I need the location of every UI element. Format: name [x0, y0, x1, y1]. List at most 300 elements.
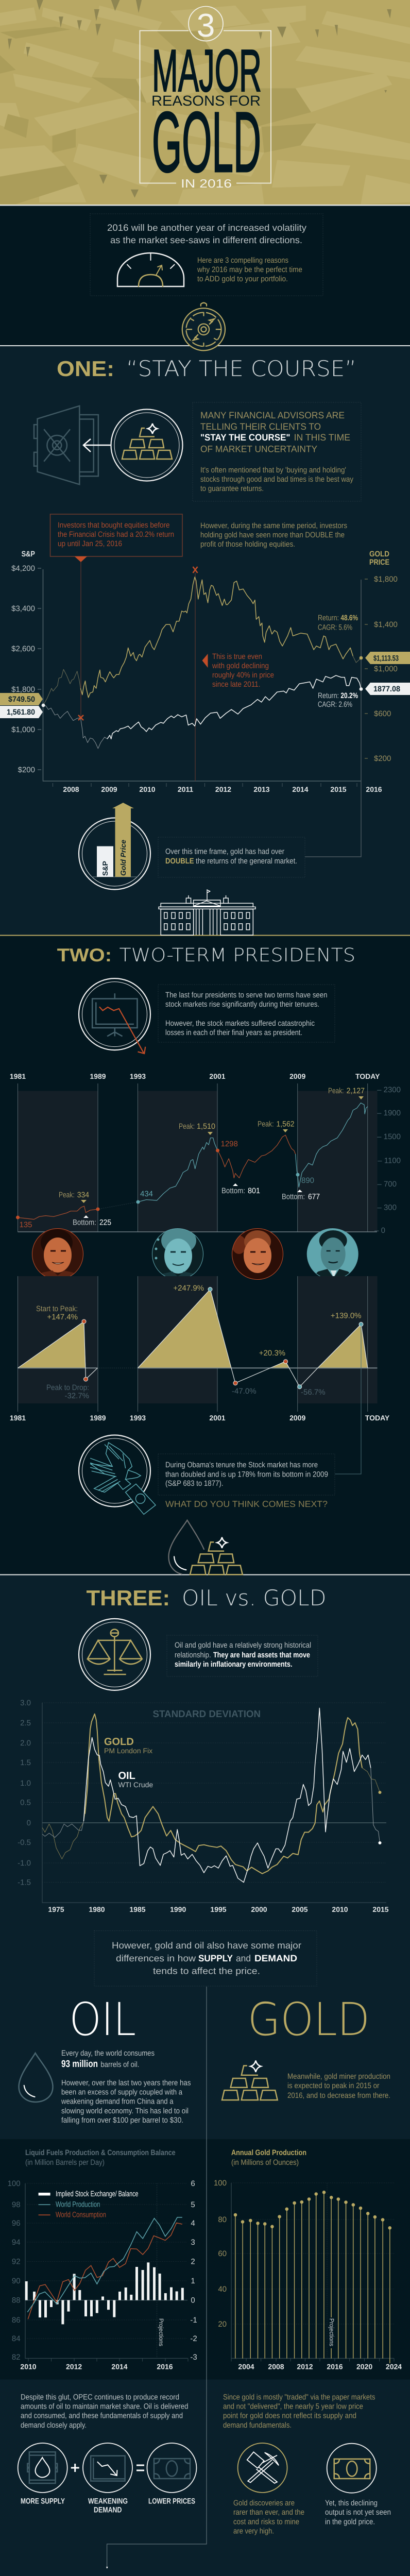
- section background: header gold: [0, 0, 410, 205]
- text: oil demand: falling from over $100 per barrel to $30.: [61, 2116, 183, 2125]
- peak and bottom labels: 2,127: [347, 1087, 365, 1095]
- arrow into safe: [83, 439, 111, 452]
- icon labels: supply equation: MORE SUPPLY: [21, 2497, 65, 2506]
- chart title: STANDARD DEVIATION: [152, 1709, 261, 1720]
- term lines and years: TODAY: [355, 1072, 380, 1080]
- text: gold production: [287, 2072, 390, 2100]
- price tags: 1,561.80: [7, 708, 35, 717]
- right axis: $1,800: [374, 575, 398, 584]
- text: gold discoveries: are very high.: [233, 2527, 274, 2536]
- right scale: -3: [190, 2353, 197, 2362]
- callout: equities return: the Financial Crisis had a 20.2% return: [58, 530, 174, 539]
- heading: two: TWO-TERM PRESIDENTS: [119, 945, 355, 966]
- x labels: 1975: [48, 1905, 64, 1913]
- gold line: [42, 1714, 380, 1874]
- percent labels: -32.7%: [64, 1392, 89, 1400]
- legend: [39, 2190, 138, 2219]
- peak and bottom labels: 890: [301, 1176, 314, 1185]
- series dots: [16, 1149, 300, 1219]
- price tags: 1877.08: [373, 685, 400, 693]
- legend: World Consumption: [56, 2210, 106, 2219]
- icon: gold banknote: [327, 2444, 377, 2493]
- scale: 60: [218, 2249, 227, 2258]
- icon: white house: [159, 890, 255, 935]
- chart: liquid fuels balance: [8, 2148, 197, 2371]
- text: oil demand: [61, 2049, 191, 2125]
- term lines and years: 2009: [289, 1414, 305, 1422]
- icon: oil drop: [19, 2053, 53, 2102]
- text: gold double: profit of those holding equities.: [200, 540, 295, 549]
- peak and bottom labels: 677: [308, 1192, 320, 1201]
- text: gold double: However, during the same time period, investors: [200, 521, 347, 530]
- right axis: $600: [374, 709, 391, 718]
- icon: oil drop and gold: [168, 1520, 243, 1574]
- text panel: stay the course: IN THIS TIME: [294, 432, 350, 443]
- percent labels: +147.4%: [47, 1313, 78, 1321]
- x labels: 1985: [129, 1905, 146, 1913]
- chart title: Liquid Fuels Production & Consumption Balance: [25, 2148, 176, 2157]
- text panel: Obama tenure: (S&P 683 to 1877).: [165, 1479, 224, 1488]
- series labels: OIL: [118, 1770, 135, 1782]
- text panel: supply and demand: SUPPLY: [198, 1953, 233, 1963]
- bar: gold price: [112, 803, 134, 877]
- left scale: [8, 2179, 21, 2362]
- title block: MAJOR: [152, 37, 262, 104]
- heading: one: “STAY THE COURSE”: [126, 356, 356, 381]
- text panel: supply and demand: and: [236, 1953, 251, 1963]
- oil line: [42, 1708, 380, 1883]
- heading: three: THREE:: [87, 1586, 170, 1610]
- year labels: 2008: [268, 2363, 284, 2371]
- text panel: supply and demand: [94, 1931, 317, 1986]
- text: oil demand: However, over the last two years there has: [61, 2078, 191, 2088]
- intro text panel: as the market see-saws in different directions.: [110, 235, 302, 245]
- intro callout text: why 2016 may be the perfect time: [197, 265, 302, 274]
- text: gold production: Meanwhile, gold miner production: [287, 2072, 390, 2081]
- left axis: $1,800: [11, 685, 35, 694]
- x labels: [48, 1905, 389, 1913]
- return labels: CAGR: 5.6%: [318, 623, 352, 632]
- peak and bottom labels: Bottom:: [282, 1192, 305, 1201]
- callout: equities return: up until Jan 25, 2016: [58, 539, 122, 548]
- term lines and years: [10, 1276, 390, 1422]
- icon: falling chart medallion: [79, 978, 150, 1054]
- x labels: 2000: [251, 1905, 267, 1913]
- text: declining output: [325, 2499, 391, 2527]
- year labels: 2024: [386, 2363, 402, 2371]
- peak and bottom labels: Peak:: [59, 1191, 75, 1199]
- heading: gold: GOLD: [248, 1993, 370, 2046]
- y labels: -0.5: [18, 1838, 31, 1847]
- scale: 80: [218, 2215, 227, 2224]
- text: declining output: Yet, this declining: [325, 2499, 378, 2507]
- left scale: 86: [12, 2316, 21, 2325]
- chart title: [231, 2148, 306, 2167]
- icon: lower prices banknote: [147, 2443, 197, 2493]
- left scale: 82: [12, 2353, 21, 2362]
- crash markers: [78, 567, 198, 720]
- intro callout text: to ADD gold to your portfolio.: [197, 275, 288, 283]
- x axis ticks and years: 2016: [366, 785, 382, 793]
- series labels: PM London Fix: [104, 1747, 152, 1755]
- year labels: 2004: [238, 2363, 254, 2371]
- y labels: [18, 1699, 31, 1887]
- text panel: stay the course: "STAY THE COURSE": [200, 432, 291, 443]
- icon: gauge: [117, 253, 184, 286]
- return labels: 20.2%: [340, 691, 358, 700]
- consumption and production lines: [27, 2217, 182, 2319]
- text panel: stay the course: to guarantee returns.: [200, 484, 264, 493]
- right axis: $1,400: [374, 620, 398, 629]
- peak and bottom labels: 334: [77, 1191, 89, 1199]
- area series: [18, 1289, 377, 1387]
- text panel: two-term presidents: The last four presidents to serve two terms have seen: [165, 991, 328, 999]
- peak and bottom labels: 434: [140, 1190, 153, 1198]
- x axis ticks and years: 2008: [63, 785, 79, 793]
- y labels: -1.0: [18, 1859, 31, 1868]
- icon: safe: [34, 406, 98, 484]
- text panel: double returns: Over this time frame, gold has had over: [165, 847, 284, 856]
- line series: [18, 1103, 368, 1219]
- text panel: Obama tenure: During Obama's tenure the Stock market has more: [165, 1461, 318, 1469]
- scale: 40: [218, 2285, 227, 2294]
- intro callout text: Here are 3 compelling reasons: [197, 256, 288, 265]
- right scale: 3: [191, 2238, 195, 2247]
- x axis ticks and years: 2010: [139, 785, 156, 793]
- icon: gold vs S&P bar medallion: [79, 803, 150, 889]
- value axis: – 1500: [377, 1132, 401, 1141]
- symbol: plus: [71, 2464, 79, 2472]
- right scale: 5: [191, 2200, 195, 2209]
- text panel: supply and demand: However, gold and oil also have some major: [112, 1940, 301, 1951]
- chart: annual gold production: [214, 2148, 402, 2371]
- price tags: $1,113.53: [373, 654, 399, 663]
- year labels: 2010: [20, 2363, 37, 2371]
- text panel: Obama tenure: [158, 1454, 335, 1495]
- text: gold paper markets: and not "delivered", the nearly 5 year low price: [223, 2402, 363, 2411]
- projections label: Projections: [158, 2318, 165, 2346]
- text: gold double: [200, 521, 347, 549]
- right scale: 0: [191, 2296, 195, 2305]
- symbol: equals: [136, 2465, 144, 2470]
- left scale: 94: [12, 2238, 21, 2247]
- callout: gold decline: with gold declining: [212, 662, 269, 670]
- peak and bottom labels: 1,562: [276, 1120, 295, 1128]
- projections label: Projections: [328, 2318, 335, 2346]
- y labels: 3.0: [20, 1699, 31, 1707]
- text: declining output: output is not yet seen: [325, 2508, 391, 2517]
- chart title: [25, 2148, 176, 2167]
- year labels: [238, 2363, 402, 2371]
- text: gold double: holding gold have seen more than DOUBLE the: [200, 531, 345, 539]
- axis titles: [22, 550, 389, 567]
- term lines and years: 2001: [209, 1072, 226, 1080]
- icon labels: supply equation: LOWER PRICES: [148, 2497, 195, 2506]
- chart: gains and losses by president: [10, 1276, 390, 1422]
- heading: oil: OIL: [69, 1993, 136, 2046]
- text panel: double returns: DOUBLE: [165, 857, 194, 866]
- red marker lines: [81, 562, 195, 781]
- term lines and years: 1993: [130, 1414, 146, 1422]
- left axis: $2,600: [11, 645, 35, 653]
- heading: one: ONE:: [57, 357, 114, 381]
- text: oil demand: been an excess of supply coupled with a: [61, 2088, 183, 2097]
- term lines and years: 1989: [90, 1072, 106, 1080]
- text panel: supply and demand: tends to affect the price.: [153, 1966, 260, 1976]
- return labels: CAGR: 2.6%: [318, 700, 352, 709]
- icon labels: supply equation: [21, 2497, 195, 2514]
- x labels: 2005: [292, 1905, 308, 1913]
- section background: reason two: [0, 936, 410, 1574]
- text panel: two-term presidents: losses in each of their final years as president.: [165, 1028, 302, 1037]
- text panel: hard assets: similarly in inflationary environments.: [175, 1660, 293, 1669]
- y labels: 2.0: [20, 1739, 31, 1748]
- left scale: 92: [12, 2258, 21, 2266]
- connector: chart to Obama note: [335, 1326, 361, 1474]
- term panels: [18, 1276, 377, 1403]
- x labels: 1990: [170, 1905, 186, 1913]
- icon: more supply barrel: [18, 2443, 67, 2493]
- S&P line: [43, 675, 361, 749]
- axis titles: S&P: [22, 550, 35, 558]
- title block: [140, 6, 271, 190]
- right scale: 4: [191, 2219, 195, 2228]
- text: gold discoveries: cost and risks to mine: [233, 2518, 299, 2527]
- price tags: $749.50: [8, 695, 35, 704]
- term lines and years: 1981: [10, 1414, 26, 1422]
- chart: standard deviation of oil and gold: [18, 1699, 389, 1913]
- callout: equities return: [50, 514, 182, 562]
- value axis: – 2300: [377, 1086, 401, 1094]
- peak and bottom labels: Bottom:: [221, 1187, 245, 1195]
- x axis ticks and years: 2012: [215, 785, 231, 793]
- text panel: stay the course: [193, 402, 361, 501]
- series labels: [104, 1736, 153, 1789]
- question: what comes next: WHAT DO YOU THINK COMES NEXT?: [165, 1499, 328, 1509]
- value axis: – 0: [374, 1226, 385, 1235]
- area dots: [82, 1287, 363, 1389]
- text: OPEC glut: Despite this glut, OPEC continues to produce record: [21, 2393, 179, 2402]
- left scale: 98: [12, 2200, 21, 2209]
- text: gold discoveries: Gold discoveries are: [233, 2499, 295, 2507]
- heading: two: TWO:: [57, 944, 112, 965]
- year labels: 2016: [327, 2363, 343, 2371]
- term lines and years: 1993: [130, 1072, 146, 1080]
- y labels: 0: [27, 1819, 31, 1827]
- year labels: [20, 2363, 173, 2371]
- peak and bottom labels: 1,510: [197, 1122, 215, 1131]
- text: oil demand: Every day, the world consumes: [61, 2049, 155, 2058]
- portrait: Clinton: [152, 1227, 203, 1280]
- value axis: – 300: [377, 1204, 397, 1212]
- percent labels: +20.3%: [259, 1349, 285, 1358]
- bar: S&P: [97, 846, 113, 877]
- x axis ticks and years: 2014: [292, 785, 309, 793]
- callout: gold decline: roughly 40% in price: [212, 671, 274, 680]
- return labels: Return:: [318, 691, 339, 700]
- intro text panel: 2016 will be another year of increased volatility: [107, 223, 306, 233]
- callout: gold decline: since late 2011.: [212, 680, 261, 689]
- lollipop heads: [234, 2191, 391, 2230]
- icon: scales medallion: [79, 1619, 150, 1690]
- chart title: Annual Gold Production: [231, 2148, 306, 2157]
- right scale: 2: [191, 2258, 195, 2266]
- percent labels: [36, 1284, 362, 1400]
- text: gold paper markets: Since gold is mostly "traded" via the paper markets: [223, 2393, 375, 2402]
- lollipop stems: [235, 2192, 390, 2363]
- text: gold paper markets: demand fundamentals.: [223, 2421, 292, 2430]
- right axis: $1,000: [374, 665, 398, 673]
- left axis: $3,400: [11, 604, 35, 613]
- heading: three: OIL vs. GOLD: [182, 1585, 327, 1611]
- x labels: 1995: [210, 1905, 227, 1913]
- icon: compass: [182, 303, 225, 350]
- left scale: 96: [12, 2219, 21, 2228]
- gold price line: [43, 577, 361, 705]
- title block: IN 2016: [181, 177, 232, 190]
- text: OPEC glut: [21, 2393, 189, 2430]
- balance bars: [25, 2262, 184, 2324]
- end dots: [378, 1791, 381, 1844]
- left scale: 100: [8, 2179, 21, 2188]
- text: gold discoveries: rarer than ever, and the: [233, 2508, 304, 2517]
- text: oil demand: 93 million: [61, 2059, 98, 2070]
- text: declining output: in the gold price.: [325, 2518, 375, 2527]
- percent labels: -56.7%: [301, 1388, 326, 1397]
- term panels: [18, 1091, 377, 1232]
- icon: safe with gold: [34, 406, 182, 484]
- value axis: [374, 1086, 401, 1235]
- scale: 20: [218, 2320, 227, 2329]
- price tags: [0, 652, 410, 718]
- section background: reason three: [0, 1575, 410, 2576]
- axis titles: GOLD: [369, 550, 389, 558]
- y labels: -1.5: [18, 1878, 31, 1887]
- text panel: double returns: the returns of the general market.: [196, 857, 297, 866]
- icon: mining tools: [238, 2443, 287, 2493]
- header gold bar texture: [0, 0, 410, 204]
- section background: reason one: [0, 346, 410, 935]
- chart: S&P vs gold price: [0, 550, 410, 857]
- percent labels: -47.0%: [232, 1387, 257, 1396]
- year labels: 2014: [111, 2363, 128, 2371]
- x axis ticks and years: 2013: [253, 785, 270, 793]
- text panel: two-term presidents: [158, 985, 335, 1042]
- value axis: – 1900: [377, 1109, 401, 1117]
- left axis: $4,200: [11, 564, 35, 573]
- y labels: 0.5: [20, 1799, 31, 1807]
- left axis: $200: [18, 766, 35, 774]
- connector: centre divider and arrow: [107, 1987, 207, 2567]
- term lines and years: 2001: [209, 1414, 226, 1422]
- callout: gold decline: [202, 652, 274, 689]
- left scale: 88: [12, 2296, 21, 2305]
- text panel: hard assets: Oil and gold have a relatively strong historical: [175, 1641, 311, 1650]
- left scale: 84: [12, 2334, 21, 2343]
- chart: S&P across presidents: [10, 1072, 401, 1235]
- text panel: hard assets: They are hard assets that move: [213, 1651, 310, 1659]
- section background: intro dark: [0, 206, 410, 345]
- left axis: $1,000: [11, 725, 35, 734]
- term lines and years: TODAY: [365, 1414, 390, 1422]
- icon: gold bars: [222, 2061, 278, 2100]
- text: gold paper markets: point for gold does not reflect its supply and: [223, 2412, 356, 2420]
- text panel: stay the course: It's often mentioned that by 'buying and holding': [200, 466, 346, 474]
- year labels: 2020: [356, 2363, 372, 2371]
- icon labels: supply equation: WEAKENING: [88, 2497, 128, 2506]
- heading: three: [87, 1585, 327, 1611]
- icon: eagle with money medallion: [79, 1435, 156, 1514]
- text panel: supply and demand: differences in how: [116, 1953, 196, 1963]
- medallion: [111, 409, 182, 481]
- text: oil demand: weakening demand from China and a: [61, 2097, 174, 2106]
- portrait: Obama: [307, 1228, 358, 1280]
- value axis: – 700: [377, 1180, 397, 1189]
- text panel: stay the course: TELLING THEIR CLIENTS TO: [200, 421, 321, 432]
- right axis: $200: [374, 754, 391, 763]
- peak and bottom labels: Peak:: [179, 1122, 195, 1131]
- x axis ticks and years: 2011: [178, 785, 193, 793]
- right axis: [305, 575, 398, 857]
- return labels: [318, 614, 358, 709]
- right scale: 1: [191, 2277, 195, 2285]
- term lines and years: [10, 1072, 380, 1232]
- text: OPEC glut: amounts of oil to maintain market share. Oil is delivered: [21, 2402, 189, 2411]
- x labels: 2010: [332, 1905, 348, 1913]
- percent labels: +247.9%: [173, 1284, 204, 1293]
- chart title: (in Millions of Ounces): [231, 2158, 299, 2167]
- text panel: hard assets: [167, 1635, 318, 1676]
- intro text panel: [90, 214, 323, 296]
- left axis: [11, 564, 361, 781]
- icon: weakening demand chart: [83, 2443, 132, 2493]
- year labels: 2012: [66, 2363, 82, 2371]
- y labels: 2.5: [20, 1719, 31, 1727]
- text panel: stay the course: OF MARKET UNCERTAINTY: [200, 444, 317, 454]
- portrait: Reagan: [32, 1228, 83, 1280]
- scale: [214, 2179, 227, 2329]
- axes and grid: [231, 2183, 394, 2362]
- bar: gold price: Gold Price: [119, 840, 127, 876]
- icon: gold bars: [122, 423, 172, 459]
- legend: Implied Stock Exchange/ Balance: [56, 2190, 138, 2198]
- text: OPEC glut: demand closely apply.: [21, 2421, 87, 2430]
- text panel: supply and demand: DEMAND: [254, 1953, 297, 1963]
- right scale: 6: [191, 2179, 195, 2188]
- portrait: Bush: [232, 1228, 283, 1280]
- axes and grid: [25, 2183, 188, 2362]
- text panel: stay the course: MANY FINANCIAL ADVISORS ARE: [200, 410, 345, 420]
- text: oil demand: barrels of oil.: [100, 2060, 139, 2069]
- text panel: two-term presidents: stock markets rise significantly during their tenures.: [165, 1000, 319, 1009]
- series labels: WTI Crude: [118, 1781, 153, 1789]
- callout: gold decline: This is true even: [212, 652, 262, 661]
- y labels: 1.5: [20, 1758, 31, 1767]
- peak and bottom labels: 1298: [220, 1140, 238, 1148]
- peak and bottom labels: 225: [99, 1218, 111, 1227]
- chart band background: [0, 2139, 410, 2380]
- heading: gold-to-oil ratio: [40, 2567, 212, 2576]
- title block: REASONS FOR: [151, 93, 261, 109]
- return labels: 48.6%: [340, 614, 358, 622]
- text panel: Obama tenure: than doubled and is up 178% from its bottom in 2009: [165, 1470, 328, 1479]
- term lines and years: 1989: [90, 1414, 106, 1422]
- value axis: – 1100: [378, 1156, 401, 1165]
- bar: S&P: S&P: [101, 861, 109, 876]
- peak and bottom labels: Peak:: [258, 1120, 274, 1128]
- right scale: -1: [190, 2316, 197, 2325]
- axis titles: PRICE: [369, 558, 389, 567]
